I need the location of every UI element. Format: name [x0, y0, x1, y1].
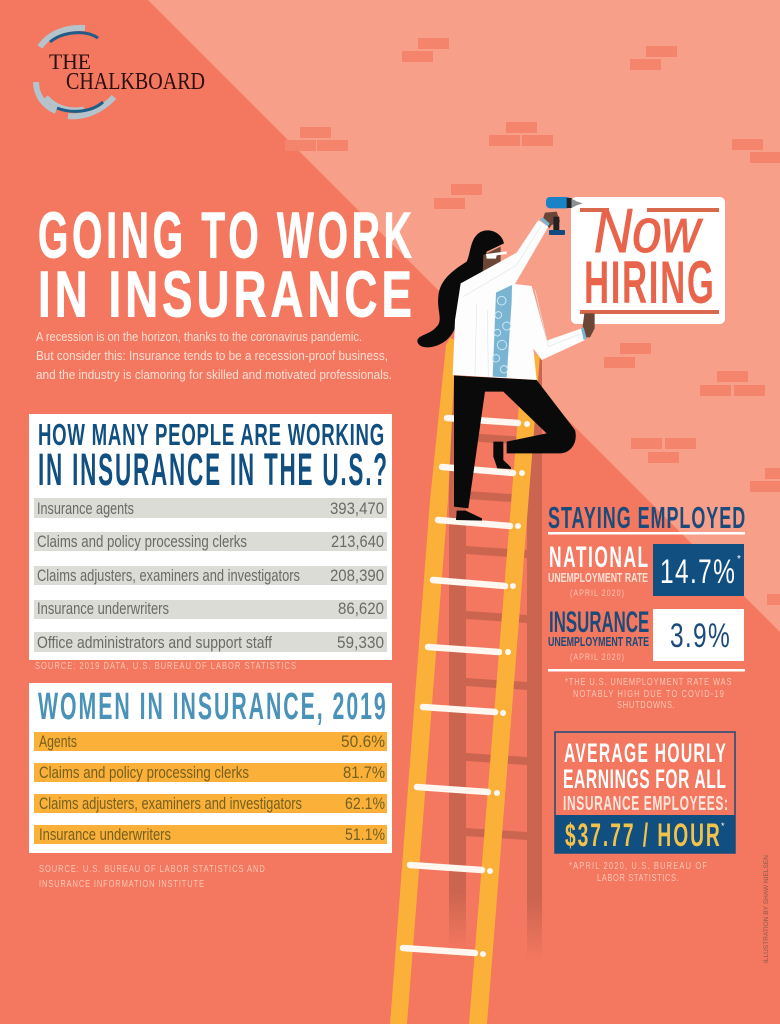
- table rows: 213,640: [331, 532, 384, 551]
- footnote: LABOR STATISTICS.: [597, 872, 679, 883]
- intro text: [36, 330, 392, 382]
- table rows: 62.1%: [345, 794, 385, 813]
- table rows: 393,470: [330, 499, 384, 518]
- footnote: NOTABLY HIGH DUE TO COVID-19: [573, 688, 724, 699]
- national rate: NATIONAL: [549, 541, 648, 574]
- footnote: *THE U.S. UNEMPLOYMENT RATE WAS: [565, 676, 732, 687]
- jacket: [453, 220, 585, 380]
- intro text: But consider this: Insurance tends to be a recession-proof business,: [36, 349, 388, 363]
- table rows: Office administrators and support staff: [37, 633, 272, 652]
- callout: hourly earnings: $37.77 / HOUR: [565, 817, 720, 853]
- intro text: and the industry is clamoring for skilled and motivated professionals.: [36, 368, 392, 382]
- hair: [417, 230, 504, 347]
- Now Hiring sign: [571, 197, 725, 324]
- table rows: Agents: [39, 732, 77, 751]
- Now Hiring sign: Now: [594, 197, 704, 266]
- table rows: Insurance underwriters: [39, 825, 171, 844]
- table rows: 59,330: [337, 633, 384, 652]
- national rate: [548, 541, 744, 598]
- table rows: 81.7%: [343, 763, 385, 782]
- heading: IN INSURANCE IN THE U.S.?: [38, 445, 387, 495]
- table rows: Insurance underwriters: [37, 599, 169, 618]
- heading: HOW MANY PEOPLE ARE WORKING: [38, 418, 384, 452]
- insurance rate: 3.9%: [670, 617, 730, 655]
- callout: hourly earnings: INSURANCE EMPLOYEES:: [563, 793, 728, 815]
- source note: SOURCE: U.S. BUREAU OF LABOR STATISTICS AND: [39, 863, 265, 874]
- national rate: 14.7%: [660, 553, 735, 591]
- background: lighter brick wall: [148, 0, 780, 632]
- table rows: Claims adjusters, examiners and investigators: [37, 566, 300, 585]
- table rows: 51.1%: [345, 825, 385, 844]
- logo: The Chalkboard: [36, 28, 205, 116]
- ladder: [390, 338, 540, 1024]
- intro text: A recession is on the horizon, thanks to the coronavirus pandemic.: [36, 330, 362, 344]
- insurance rate: [548, 606, 744, 662]
- face: [483, 247, 501, 275]
- table rows: Claims and policy processing clerks: [37, 532, 247, 551]
- tie: [492, 285, 512, 377]
- insurance rate: INSURANCE: [549, 606, 649, 639]
- table rows: [34, 732, 387, 844]
- woman on ladder with drill: [417, 197, 595, 521]
- callout: hourly earnings: *: [721, 821, 725, 831]
- heading: [38, 418, 387, 495]
- heading: WOMEN IN INSURANCE, 2019: [38, 684, 386, 728]
- cuffs: [540, 217, 587, 340]
- insurance rate: (APRIL 2020): [570, 651, 624, 662]
- shadow of ladder on wall: [449, 355, 542, 960]
- drill: [546, 197, 583, 235]
- heading: STAYING EMPLOYED: [548, 501, 745, 535]
- panel: how many people work in insurance: [29, 414, 392, 660]
- hands: [543, 212, 595, 337]
- national rate: (APRIL 2020): [570, 587, 624, 598]
- national rate: UNEMPLOYMENT RATE: [548, 571, 648, 585]
- panel: staying employed: [548, 501, 745, 710]
- table rows: Claims adjusters, examiners and investigators: [39, 794, 302, 813]
- trousers: [454, 376, 576, 508]
- panel: women in insurance: [29, 683, 392, 853]
- table rows: 208,390: [330, 566, 384, 585]
- logo: The Chalkboard: CHALKBOARD: [66, 69, 205, 95]
- callout: hourly earnings: EARNINGS FOR ALL: [563, 764, 726, 794]
- footnote: SHUTDOWNS.: [617, 699, 675, 710]
- title: IN INSURANCE: [38, 257, 412, 330]
- shoes: [456, 442, 511, 521]
- source note: [39, 863, 265, 889]
- callout: hourly earnings: [555, 732, 735, 853]
- glasses: [486, 251, 507, 259]
- title: [38, 199, 412, 330]
- table rows: 50.6%: [341, 732, 385, 751]
- illustration credit: ILLUSTRATION BY SHAW NIELSEN: [763, 855, 770, 963]
- jacket seams: [463, 225, 582, 377]
- source note: SOURCE: 2019 DATA, U.S. BUREAU OF LABOR STATISTICS: [35, 660, 296, 671]
- source note: INSURANCE INFORMATION INSTITUTE: [39, 878, 204, 889]
- title: GOING TO WORK: [38, 199, 412, 272]
- table rows: Insurance agents: [37, 499, 134, 518]
- footnote: [569, 860, 708, 883]
- table rows: [34, 498, 387, 652]
- table rows: Claims and policy processing clerks: [39, 763, 249, 782]
- logo: The Chalkboard: THE: [49, 49, 91, 74]
- national rate: *: [737, 554, 741, 565]
- footnote: [565, 676, 732, 710]
- footnote: *APRIL 2020, U.S. BUREAU OF: [569, 860, 708, 871]
- insurance rate: UNEMPLOYMENT RATE: [548, 635, 649, 649]
- callout: hourly earnings: AVERAGE HOURLY: [564, 738, 726, 768]
- Now Hiring sign: HIRING: [584, 250, 714, 316]
- table rows: 86,620: [338, 599, 384, 618]
